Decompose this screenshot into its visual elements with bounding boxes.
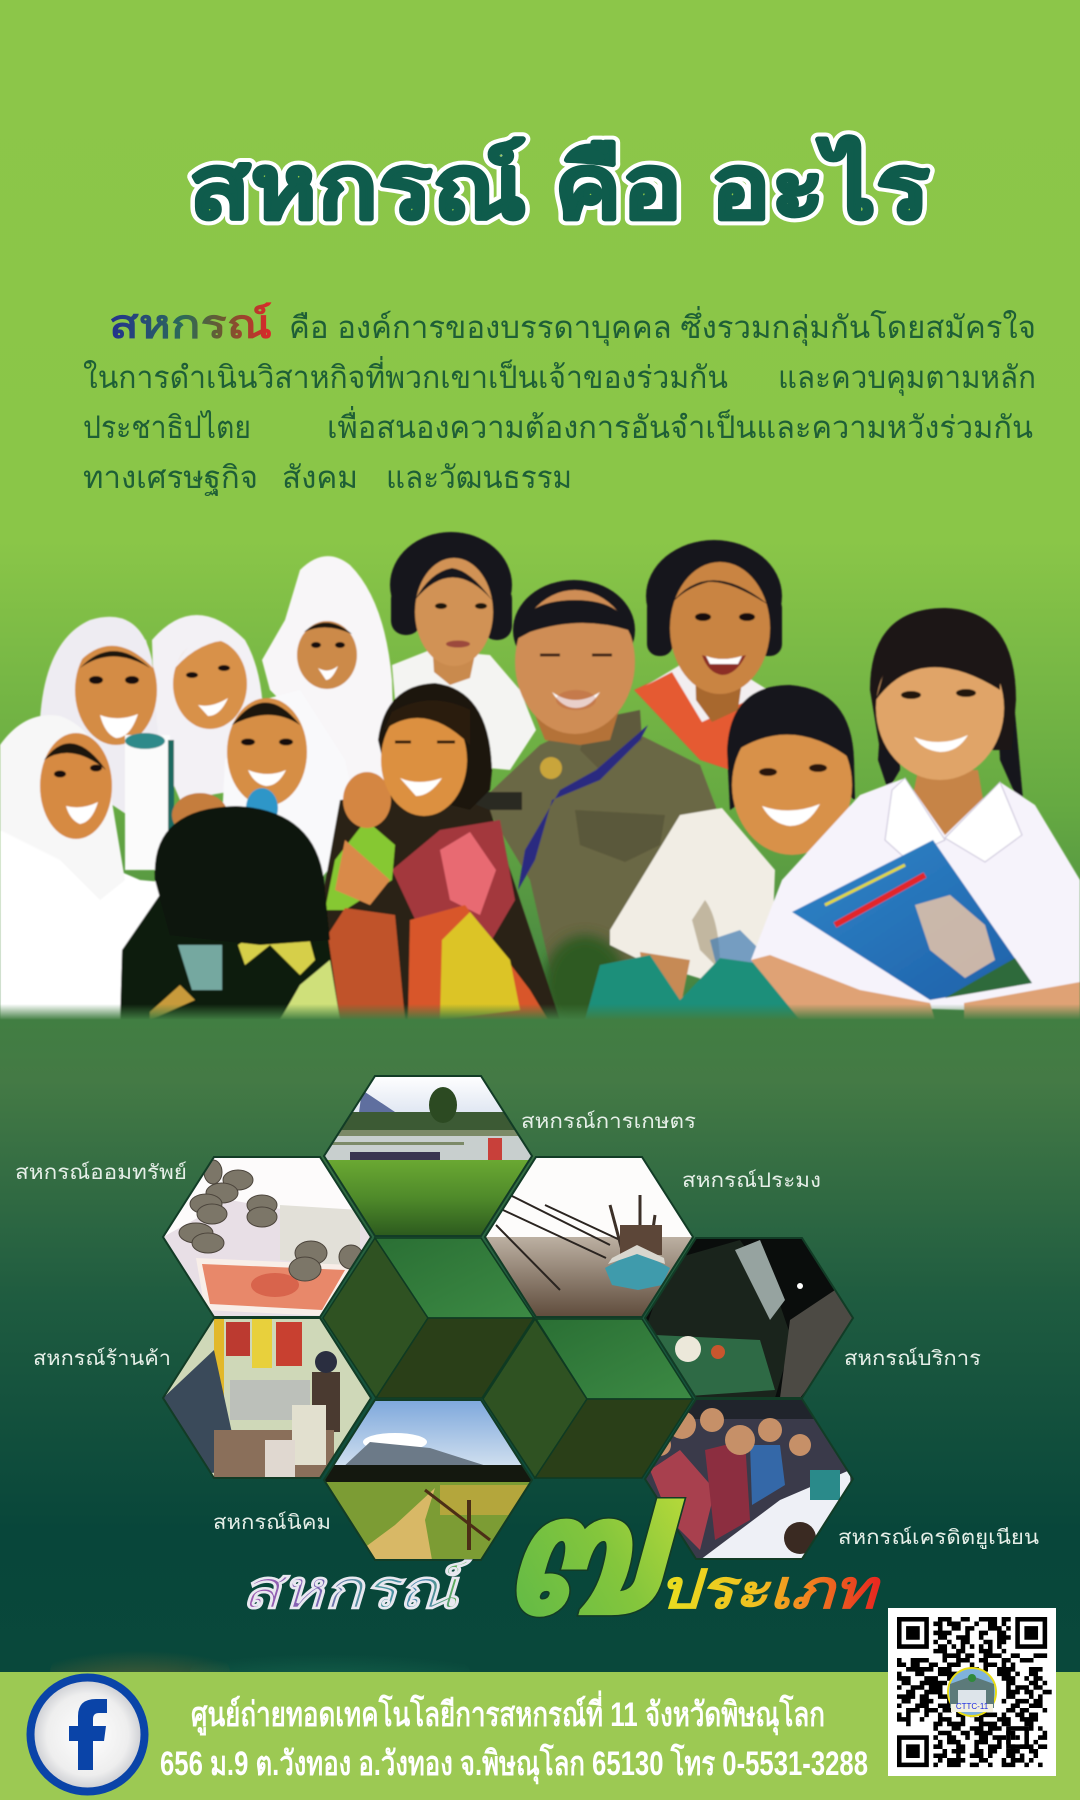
text block: definition: และวัฒนธรรม (386, 460, 572, 495)
hexagon photo: fishing boat (485, 1157, 693, 1317)
hexagon outlines (163, 1076, 853, 1560)
label: fishery: สหกรณ์ประมง (682, 1169, 821, 1192)
child: girl in hijab, second left (152, 615, 263, 800)
title: สหกรณ์ คือ อะไร (189, 136, 930, 238)
hexagon photo: country road (324, 1400, 532, 1562)
hexagon photo: coins and banknotes (163, 1157, 371, 1317)
heading word: cooperative: สหกรณ์ (241, 1559, 472, 1620)
label: savings: สหกรณ์ออมทรัพย์ (15, 1161, 187, 1184)
child: girl in hijab, front left (0, 715, 125, 874)
text block: definition (83, 302, 1036, 496)
footer text: organisation and address (160, 1690, 868, 1785)
title: สหกรณ์ คือ อะไร (189, 136, 930, 238)
hexagon diagram (15, 1076, 1039, 1562)
hexagon photo: credit union crowd (640, 1399, 853, 1560)
highlighted word: สหกรณ์ (109, 302, 272, 347)
child: dark hair child from behind (120, 806, 340, 1020)
child: girl in red shirt (634, 540, 782, 770)
text block: definition: เพื่อสนองความต้องการอันจำเป็นและความหวังร่วมกัน (327, 406, 1033, 445)
cube hexagon, right (483, 1319, 693, 1478)
label: settlement: สหกรณ์นิคม (213, 1511, 331, 1534)
child: girl in hijab, back row centre-right (262, 556, 395, 800)
white lower left mass (0, 830, 250, 1020)
text block: definition: คือ องค์การของบรรดาบุคคล ซึ่งรวมกลุ่มกันโดยสมัครใจ (289, 306, 1036, 347)
QR centre logo: CTTC-11 (956, 1702, 989, 1711)
child: boy in white t-shirt (585, 685, 855, 1020)
child: boy in scout uniform (475, 579, 717, 1016)
text block: definition: และควบคุมตามหลัก (778, 360, 1036, 397)
heading: seven types of cooperatives (241, 1432, 881, 1655)
hexagon photo: shop (163, 1318, 371, 1478)
child: short hair girl (390, 532, 536, 770)
label: service: สหกรณ์บริการ (844, 1347, 981, 1370)
QR code (888, 1608, 1056, 1776)
hexagon labels (15, 1110, 1039, 1550)
heading numeral seven: ๗ (498, 1432, 685, 1655)
child: girl in hijab, far back left (40, 617, 174, 870)
label: agriculture: สหกรณ์การเกษตร (521, 1110, 696, 1133)
footer band (0, 1672, 1080, 1800)
icon: facebook (26, 1674, 148, 1796)
QR centre logo (948, 1668, 996, 1716)
photo: group of children (0, 532, 1080, 1035)
child: girl in hijab, centre (170, 695, 350, 878)
child: girl in tribal dress (318, 683, 560, 1020)
text block: definition: ในการดำเนินวิสาหกิจที่พวกเขาเป็นเจ้าของร่วมกัน (83, 356, 728, 395)
label: credit union: สหกรณ์เครดิตยูเนียน (838, 1526, 1039, 1550)
hexagon photo: bus at night (645, 1238, 853, 1398)
text block: definition: ทางเศรษฐกิจ (83, 460, 258, 496)
bottom fade (0, 1004, 1080, 1020)
text block: definition: ประชาธิปไตย (83, 410, 251, 445)
cube hexagon, left (323, 1238, 534, 1398)
hexagon photo: rice field (324, 1076, 532, 1236)
footer text: organisation and address: 656 ม.9 ต.วังทอง อ.วังทอง จ.พิษณุโลก 65130 โทร 0-5531-3288 (160, 1743, 868, 1785)
text block: definition: สังคม (282, 460, 358, 495)
heading word: types: ประเภท (658, 1560, 881, 1620)
decorative glow above footer (50, 1636, 470, 1708)
label: shop: สหกรณ์ร้านค้า (33, 1347, 171, 1370)
child: girl with braids and book (751, 608, 1080, 1020)
footer text: organisation and address: ศูนย์ถ่ายทอดเทคโนโลยีการสหกรณ์ที่ 11 จังหวัดพิษณุโลก (191, 1690, 825, 1736)
